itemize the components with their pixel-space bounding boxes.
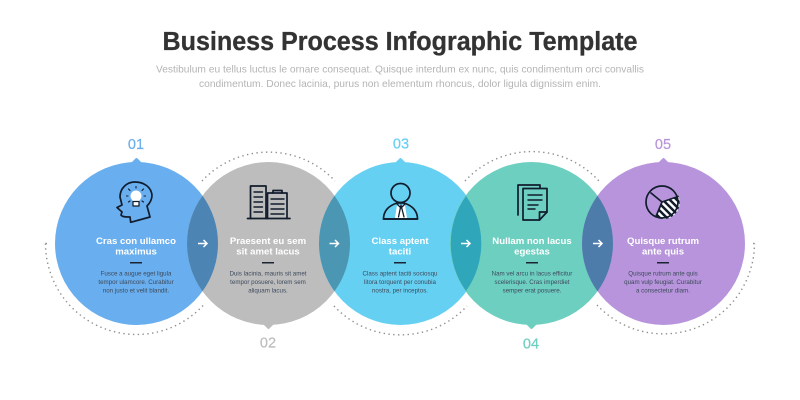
step 1 text: Fusce a augue eget ligula <box>101 270 172 278</box>
number 01: 01 <box>128 137 144 153</box>
overlap 4-5 <box>582 196 613 291</box>
step 4 text: Nullam non lacus <box>492 236 572 247</box>
step 1 text: Cras con ullamco <box>96 236 176 247</box>
step 2 text: tempor posuere, lorem sem <box>230 279 306 286</box>
step 4 text: scelerisque. Cras imperdiet <box>495 279 570 286</box>
overlap 2-3 <box>319 196 350 291</box>
overlap 3-4 <box>451 196 481 291</box>
step 5 text: a consectetur diam. <box>636 288 690 295</box>
step 1 circle <box>55 158 218 325</box>
step 3 text <box>363 236 438 295</box>
step 1 text: non justo et velit blandit. <box>103 288 169 295</box>
step 3 text: litora torquent per conubia <box>364 279 437 286</box>
step 3 text: Class aptent <box>371 236 429 247</box>
number 02: 02 <box>260 336 276 352</box>
step 2 text <box>229 236 307 295</box>
step 3 circle <box>319 158 482 325</box>
icon: head with light bulb <box>117 182 152 222</box>
dotted arc: step 2 <box>202 152 335 181</box>
icon: office buildings <box>248 186 290 218</box>
step 2 text: aliquam lacus. <box>248 288 288 295</box>
step 1 text: maximus <box>115 246 157 258</box>
step 5 text: Quisque rutrum ante quis <box>628 270 698 278</box>
step 2 text: sit amet lacus <box>236 246 300 258</box>
number 03: 03 <box>393 136 409 152</box>
icon: businessman <box>384 184 418 219</box>
step 3 text: nostra, per inceptos. <box>372 288 428 295</box>
number 05: 05 <box>655 137 671 153</box>
icon: pie chart <box>645 185 680 220</box>
step 5 text <box>624 236 702 295</box>
step 4 circle <box>450 162 613 329</box>
dotted arc: step 1 <box>46 244 204 334</box>
overlap 1-2 <box>187 196 218 291</box>
step 5 text: quam vulp feugiat. Curabitur <box>624 279 702 286</box>
number 04: 04 <box>523 336 539 352</box>
dotted arc: step 5 <box>597 244 754 334</box>
step 2 text: Duis lacinia, mauris sit amet <box>229 270 307 278</box>
step 4 text: semper erat posuere. <box>503 288 562 295</box>
step 3 text: Class aptent taciti sociosqu <box>363 270 438 278</box>
step 4 text: Nam vel arcu in lacus efficitur <box>492 270 572 278</box>
dotted arc: step 3 <box>334 306 467 335</box>
step 3 text: taciti <box>389 246 411 258</box>
arrow 3 <box>461 240 470 247</box>
subtitle <box>156 64 644 90</box>
dotted arc: step 4 <box>465 152 599 181</box>
step 5 text: ante quis <box>642 246 684 258</box>
arrow 4 <box>593 240 602 247</box>
step 2 text: Praesent eu sem <box>230 236 306 247</box>
step 1 text <box>96 236 176 295</box>
subtitle: condimentum. Donec lacinia, purus non elementum rhoncus, dolor ligula dignissim enim. <box>199 79 601 90</box>
step 4 text <box>492 236 572 295</box>
step 5 text: Quisque rutrum <box>627 236 699 247</box>
icon: documents <box>518 185 547 220</box>
step 1 text: tempor ulamcore. Curabitur <box>98 279 174 286</box>
step 2 circle <box>187 162 350 329</box>
subtitle: Vestibulum eu tellus luctus le ornare consequat. Quisque interdum ex nunc, quis condimentum orci convallis <box>156 64 644 76</box>
title: Business Process Infographic Template <box>162 28 638 56</box>
arrow 2 <box>330 240 338 247</box>
step 4 text: egestas <box>514 246 550 258</box>
arrow 1 <box>198 240 207 247</box>
step 5 circle <box>582 158 745 325</box>
